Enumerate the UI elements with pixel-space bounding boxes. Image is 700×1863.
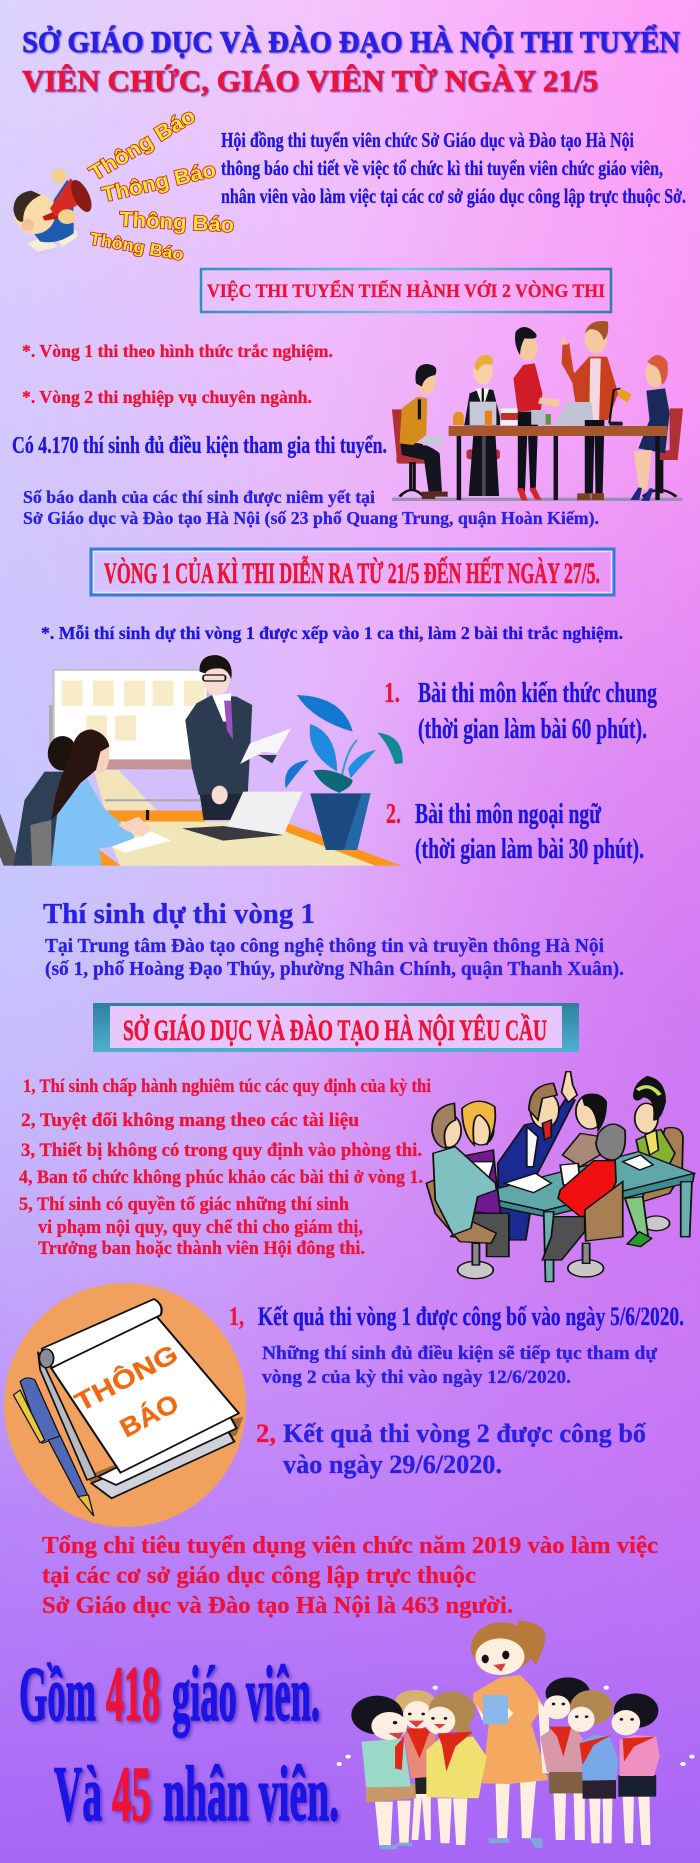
candidate number notice: Sở Giáo dục và Đào tạo Hà Nội (số 23 phố Quang Trung, quận Hoàn Kiếm). [23, 508, 599, 529]
illustration: presentation meeting [0, 655, 403, 866]
test list: 2. [386, 799, 401, 830]
big figures [19, 1650, 339, 1837]
round 1 venue address [45, 935, 624, 980]
recruitment total: Tổng chỉ tiêu tuyển dụng viên chức năm 2019 vào làm việc [42, 1533, 658, 1559]
illustration: cartoon meeting [426, 1072, 694, 1282]
big figures: Gồm [19, 1650, 96, 1737]
round list: *. Vòng 1 thi theo hình thức trắc nghiệm. [22, 341, 333, 361]
heading box: two rounds [201, 269, 611, 312]
illustration: teacher and pupils [337, 1620, 695, 1849]
round 1 venue address: Tại Trung tâm Đào tạo công nghệ thông tin và truyền thông Hà Nội [45, 935, 604, 957]
heading box: two rounds: VIỆC THI TUYỂN TIẾN HÀNH VỚI 2 VÒNG THI [207, 280, 605, 302]
test list: 1. [384, 678, 400, 709]
illustration: notice notepad: THÔNG [70, 1338, 183, 1417]
illustration: notice notepad [4, 1283, 246, 1527]
big figures: giáo viên. [172, 1650, 320, 1737]
test list: Bài thi môn ngoại ngữ [415, 799, 602, 830]
heading box: round 1 dates [91, 549, 614, 595]
round 1 venue heading: Thí sinh dự thi vòng 1 [43, 899, 315, 930]
icon: notice words: Thông Báo [100, 158, 218, 207]
big figures: Và [54, 1750, 102, 1837]
results list: Kết quả thi vòng 2 được công bố [283, 1419, 647, 1448]
icon: notice words [86, 104, 235, 264]
round 1 venue address: (số 1, phố Hoàng Đạo Thúy, phường Nhân Chính, quận Thanh Xuân). [45, 958, 624, 980]
candidate number notice: Số báo danh của các thí sinh được niêm yết tại [23, 487, 375, 507]
recruitment total: Sở Giáo dục và Đào tạo Hà Nội là 463 người. [42, 1593, 513, 1619]
intro text [221, 128, 686, 208]
illustration: notice notepad: BÁO [115, 1388, 184, 1443]
title [22, 24, 680, 98]
round list [22, 341, 333, 407]
illustration: office team [392, 321, 683, 501]
requirements list: 1, Thí sinh chấp hành nghiêm túc các quy định của kỳ thi [23, 1076, 431, 1097]
requirements list: 3, Thiết bị không có trong quy định vào phòng thi. [21, 1140, 422, 1161]
results list: Những thí sinh đủ điều kiện sẽ tiếp tục tham dự [262, 1343, 658, 1364]
results list [229, 1302, 684, 1479]
requirements list: Trưởng ban hoặc thành viên Hội đông thi. [38, 1238, 365, 1259]
results list: 2, [256, 1419, 276, 1448]
icon: notice words: Thông Báo [88, 229, 185, 264]
candidate number notice [23, 487, 599, 529]
candidate count: Có 4.170 thí sinh đủ điều kiện tham gia thi tuyển. [12, 433, 387, 459]
icon: notice words: Thông Báo [119, 208, 235, 237]
icon: mascot with megaphone [13, 169, 96, 252]
results list: vào ngày 29/6/2020. [283, 1450, 502, 1479]
big figures: nhân viên. [163, 1750, 339, 1837]
requirements list [19, 1076, 431, 1259]
icon: notice words: Thông Báo [86, 104, 200, 185]
big figures: 418 [106, 1650, 160, 1737]
test list [384, 678, 657, 865]
recruitment total [42, 1533, 658, 1619]
recruitment total: tại các cơ sở giáo dục công lập trực thuộc [42, 1563, 476, 1589]
requirements list: 5, Thí sinh có quyền tố giác những thí sinh [19, 1194, 349, 1215]
results list: vòng 2 của kỳ thi vào ngày 12/6/2020. [262, 1367, 571, 1388]
requirements list: 4, Ban tổ chức không phúc khảo các bài thi ở vòng 1. [19, 1167, 423, 1188]
heading box: requirements [93, 1003, 579, 1052]
title: VIÊN CHỨC, GIÁO VIÊN TỪ NGÀY 21/5 [22, 63, 598, 98]
big figures: 45 [112, 1750, 151, 1837]
round 1 note: *. Mỗi thí sinh dự thi vòng 1 được xếp vào 1 ca thi, làm 2 bài thi trắc nghiệm. [41, 623, 623, 643]
round list: *. Vòng 2 thi nghiệp vụ chuyên ngành. [22, 387, 312, 407]
requirements list: vi phạm nội quy, quy chế thi cho giám thị, [38, 1217, 363, 1238]
results list: 1, [229, 1302, 244, 1331]
requirements list: 2, Tuyệt đối không mang theo các tài liệu [21, 1110, 359, 1131]
